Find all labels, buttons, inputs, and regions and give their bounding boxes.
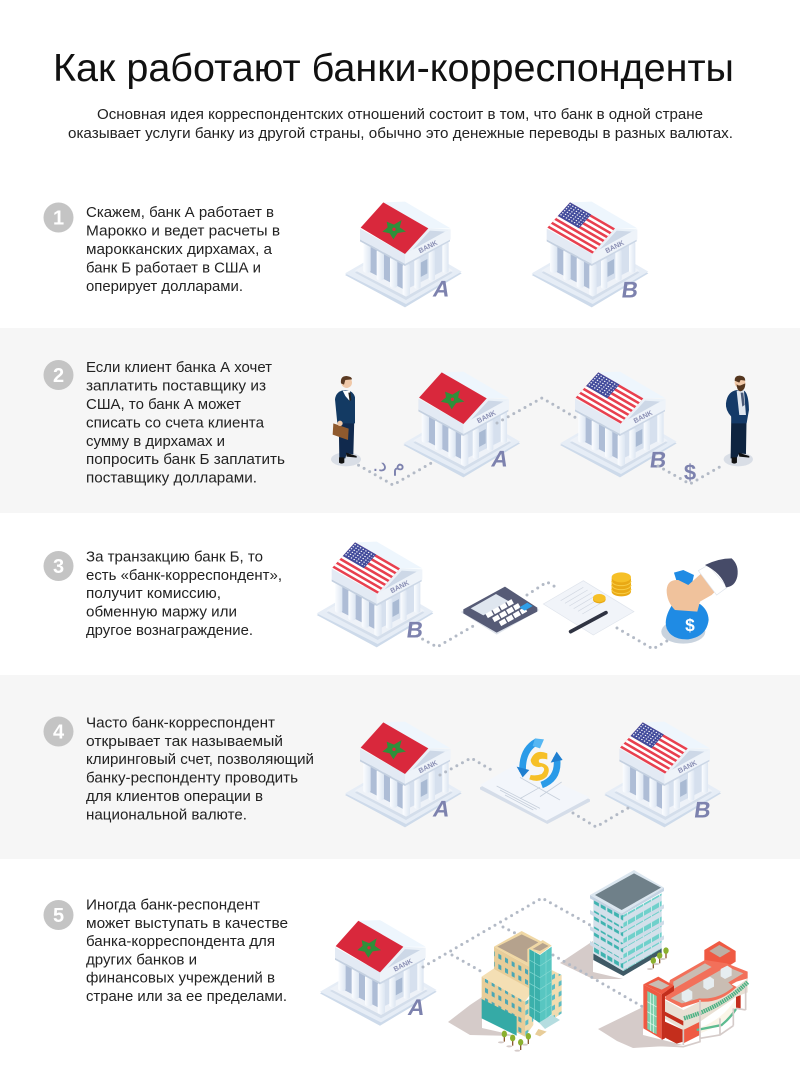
step number 1 (44, 202, 74, 232)
icon: ledger with currency exchange (480, 738, 590, 824)
step 3 text: другое вознаграждение. (86, 622, 253, 639)
icon: bank A Morocco: BANK (393, 958, 414, 974)
intro text: Основная идея корреспондентских отношений состоит в том, что банк в одной стране (97, 107, 703, 123)
step 4 text: банку-респонденту проводить (86, 770, 298, 786)
icon: bank A Morocco: BANK (418, 760, 439, 775)
step 1 text: марокканских дирхамах, а (86, 241, 273, 258)
step 5 text: других банков и (86, 952, 197, 968)
icon: bank B USA (532, 202, 648, 307)
step number 2 (44, 360, 74, 390)
step 2 background (0, 328, 800, 513)
step 2 text: попросить банк Б заплатить (86, 451, 285, 468)
icon: bank A Morocco: A (489, 446, 511, 472)
icon: bank B USA (604, 722, 721, 827)
panel: step 2 (0, 328, 800, 513)
step 4 text: Часто банк-корреспондент (86, 714, 275, 732)
intro text (68, 107, 733, 142)
icon: bank B USA: B (693, 796, 713, 822)
step 2 text: поставщику долларами. (86, 470, 257, 486)
building shadows (448, 941, 683, 1048)
step number 4: 4 (53, 722, 65, 744)
icon: client with briefcase (331, 376, 361, 466)
step 4 text: открывает так называемый (86, 733, 283, 750)
label: dollar sign: $ (684, 460, 696, 485)
step 1 text: оперирует долларами. (86, 278, 243, 295)
icon: bank A Morocco: A (406, 994, 428, 1020)
step number 5 (44, 900, 74, 930)
step 5 text (86, 896, 288, 1005)
icon: supplier in suit (724, 376, 753, 466)
step 3 text: получит комиссию, (86, 585, 221, 602)
step 5 text: банка-корреспондента для (86, 933, 275, 950)
panel: step 3 (44, 542, 738, 649)
step number 1: 1 (53, 208, 64, 230)
step 4 text: клиринговый счет, позволяющий (86, 751, 314, 768)
step number 3: 3 (53, 556, 64, 578)
intro text: оказывает услуги банку из другой страны, обычно это денежные переводы в разных валютах. (68, 126, 733, 142)
icon: bank B USA (317, 542, 433, 647)
step 3 text: За транзакцию банк Б, то (86, 548, 263, 566)
icon: bank A Morocco (345, 202, 462, 307)
step number 5: 5 (53, 905, 64, 927)
step 1 text: Марокко и ведет расчеты в (86, 222, 280, 240)
step 2 text: сумму в дирхамах и (86, 433, 225, 450)
step 2 text (86, 359, 285, 486)
icon: tan office tower (482, 931, 562, 1052)
step number 4 (44, 716, 74, 746)
icon: hand holding money bag (661, 558, 738, 644)
icon: bank A Morocco (345, 722, 462, 827)
dotted connectors step 4 (440, 758, 628, 827)
step number 2: 2 (53, 365, 64, 387)
step 1 text (86, 204, 280, 295)
icon: bank A Morocco: A (431, 276, 453, 302)
panel: step 1 (44, 202, 648, 307)
step 5 text: может выступать в качестве (86, 915, 288, 932)
step 2 text: списать со счета клиента (86, 414, 265, 432)
icon: glass office building (590, 870, 669, 976)
icon: bank B USA: BANK (677, 760, 698, 775)
icon: bank A Morocco: BANK (418, 240, 439, 255)
step 5 text: финансовых учреждений в (86, 970, 275, 986)
dotted connectors step 5 (423, 898, 643, 1007)
step 3 text (86, 548, 282, 639)
icon: hand holding money bag: $ (685, 615, 695, 635)
icon: bank A Morocco (320, 920, 437, 1026)
label: dirham sign: م د. (373, 454, 405, 476)
step 2 text: Если клиент банка А хочет (86, 359, 272, 376)
icon: bank B USA: BANK (604, 240, 626, 255)
dotted connectors step 2 (353, 398, 723, 485)
dotted connectors step 3 (417, 582, 672, 649)
icon: bank B USA: B (648, 446, 668, 472)
step 4 text (86, 714, 314, 824)
step 2 text: заплатить поставщику из (86, 378, 266, 394)
step 5 text: стране или за ее пределами. (86, 988, 287, 1005)
step 1 text: банк Б работает в США и (86, 260, 261, 276)
icon: document with pen and coins (543, 572, 634, 635)
step number 3 (44, 551, 74, 581)
icon: bank B USA: B (405, 616, 425, 642)
step 5 text: Иногда банк-респондент (86, 896, 260, 914)
panel: step 4 (0, 675, 800, 859)
step 4 text: национальной валюте. (86, 806, 247, 824)
step 2 text: США, то банк А может (86, 396, 241, 413)
title: Как работают банки-корреспонденты (53, 47, 734, 90)
icon: bank B USA: B (620, 276, 640, 302)
icon: bank A Morocco (403, 372, 520, 477)
icon: bank B USA (560, 372, 677, 477)
step 4 background (0, 675, 800, 859)
icon: bank B USA: BANK (633, 410, 654, 425)
step 3 text: обменную маржу или (86, 604, 237, 620)
icon: red shopping centre (643, 941, 748, 1047)
step 1 text: Скажем, банк А работает в (86, 204, 274, 221)
icon: bank A Morocco: A (431, 796, 453, 822)
icon: calculator (461, 587, 539, 635)
step 4 text: для клиентов операции в (86, 788, 263, 805)
icon: bank A Morocco: BANK (476, 410, 497, 425)
step 3 text: есть «банк-корреспондент», (86, 567, 282, 584)
panel: step 5 (44, 870, 748, 1052)
icon: bank B USA: BANK (389, 580, 411, 595)
